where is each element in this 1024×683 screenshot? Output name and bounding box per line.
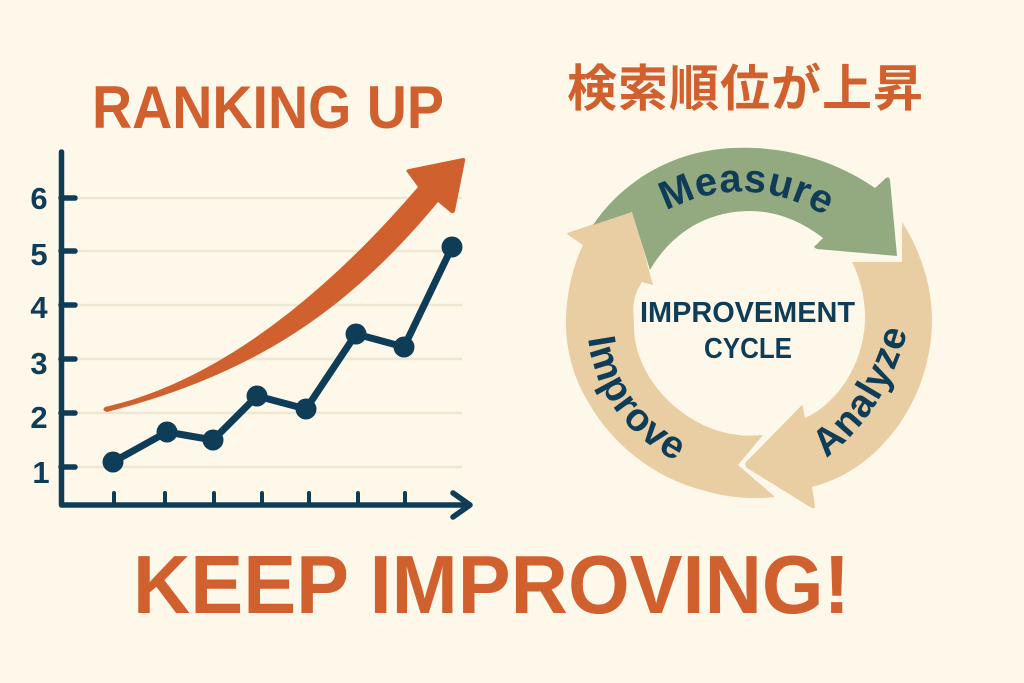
- chart axes: [61, 152, 470, 517]
- y axis numbers: 2: [30, 400, 48, 435]
- line chart: [30, 152, 470, 517]
- label: Measure: Measure: [658, 170, 831, 212]
- y axis numbers: [30, 181, 50, 490]
- arrow: rising trend: [103, 158, 465, 412]
- label: Analyze: Analyze: [816, 329, 906, 458]
- data line with markers: [102, 236, 462, 472]
- title: Ranking Up: RANKING UP: [92, 74, 444, 141]
- headline: Keep Improving: KEEP IMPROVING!: [133, 538, 850, 631]
- title: Japanese ranking rise: 検索順位が上昇: [567, 49, 923, 121]
- improvement cycle diagram: [566, 148, 932, 508]
- arrow: analyze segment: [745, 222, 932, 508]
- y axis numbers: 3: [30, 346, 48, 381]
- center label: IMPROVEMENT: [640, 297, 855, 329]
- y axis numbers: 4: [30, 290, 48, 325]
- arrow: improve segment: [566, 212, 775, 498]
- label: Improve: Improve: [588, 336, 682, 458]
- center label: CYCLE: [704, 333, 792, 365]
- y axis numbers: 5: [30, 237, 48, 272]
- arrow: measure segment: [593, 148, 897, 270]
- y axis numbers: 6: [30, 181, 48, 216]
- y axis numbers: 1: [32, 455, 50, 490]
- center label: [640, 297, 855, 365]
